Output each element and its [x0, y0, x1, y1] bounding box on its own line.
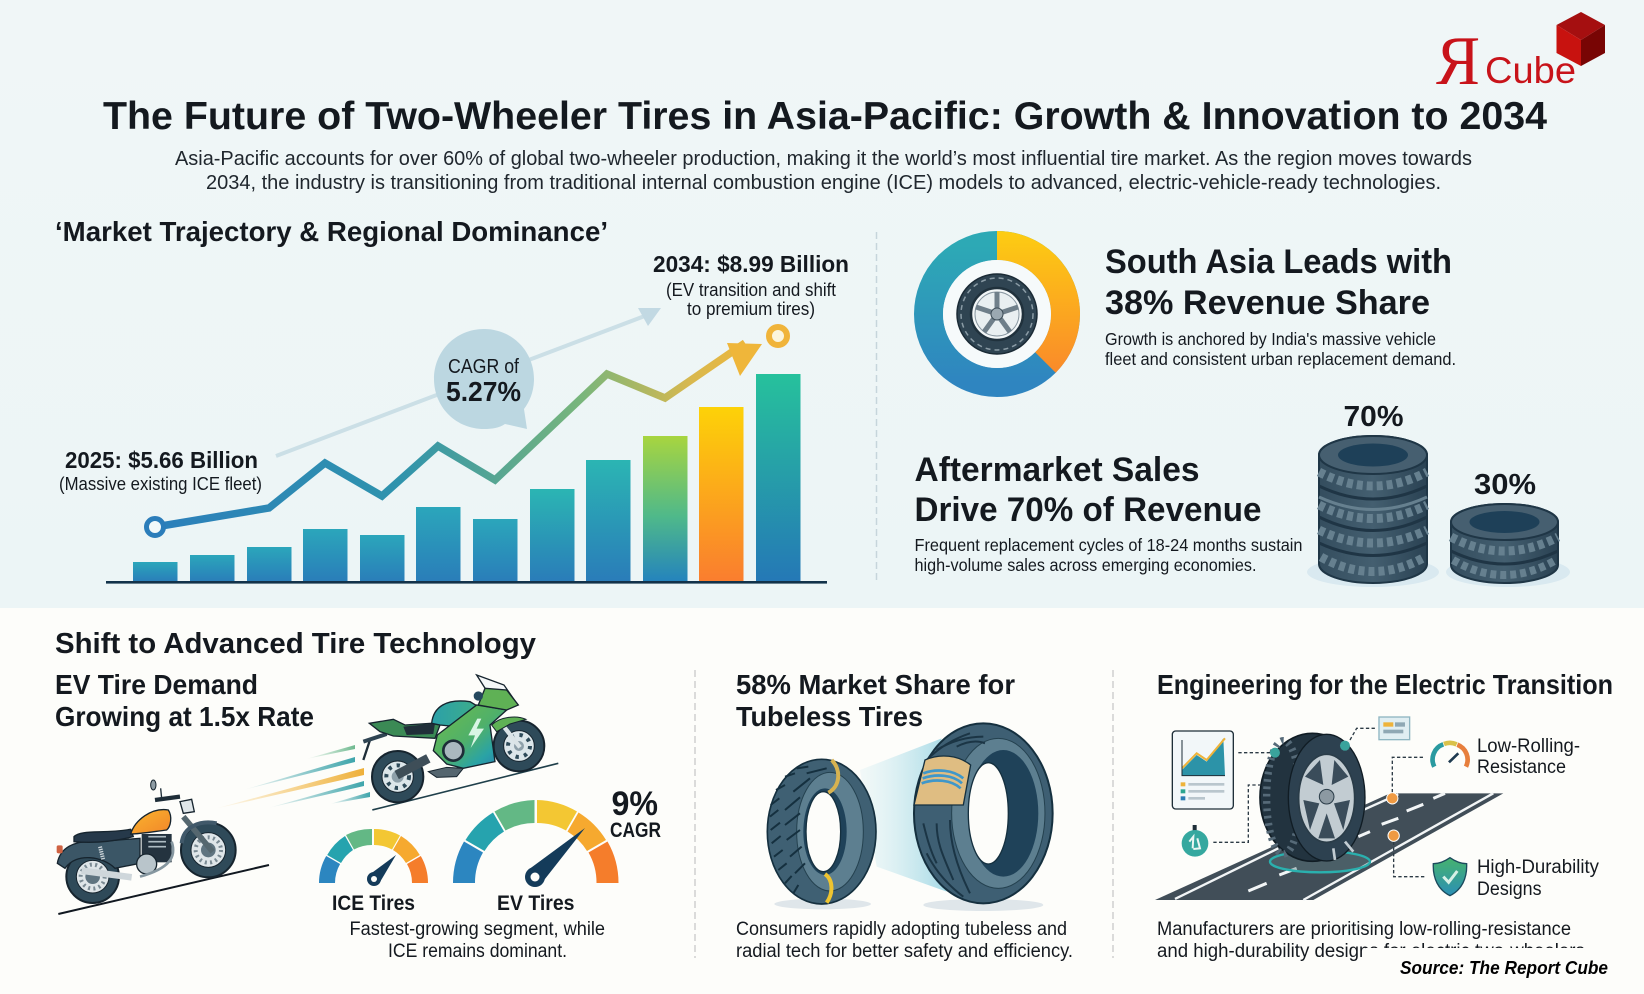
- label: 70%: 70%: [1344, 401, 1404, 433]
- label: 2034 value: to premium tires): [687, 299, 815, 319]
- label: low rolling resistance: Low-Rolling-: [1477, 736, 1580, 757]
- source note: [1366, 948, 1644, 994]
- label: low rolling resistance: [1477, 736, 1580, 778]
- text block: South Asia: Growth is anchored by India's massive vehicle: [1105, 329, 1436, 349]
- road: [1155, 793, 1503, 900]
- heading: EV tire demand: Growing at 1.5x Rate: [55, 701, 314, 732]
- logo: RCube: Я: [1436, 23, 1480, 100]
- icon: rolling resistance gauge: [1433, 743, 1468, 767]
- label: 9% CAGR: CAGR: [610, 819, 661, 842]
- trend line: [155, 343, 745, 527]
- small tire: [767, 759, 876, 904]
- intro text: [175, 148, 1472, 194]
- teal nodes: [1270, 748, 1280, 758]
- light beam: [860, 738, 947, 892]
- icon: electric motorcycle: [363, 675, 558, 810]
- panel: market overview background: [0, 0, 1644, 608]
- text block: fastest growing: [350, 919, 605, 962]
- label: 2034 value: (EV transition and shift: [666, 280, 836, 300]
- text block: South Asia: South Asia Leads with: [1105, 243, 1452, 281]
- text block: aftermarket: [914, 451, 1302, 575]
- label: low rolling resistance: Resistance: [1477, 757, 1566, 778]
- text block: fastest growing: Fastest-growing segment, while: [350, 919, 605, 940]
- end marker: [769, 327, 787, 345]
- label: 2025 value: (Massive existing ICE fleet): [59, 474, 262, 494]
- label: 2034 value: 2034: $8.99 Billion: [653, 251, 849, 277]
- label: high durability: High-Durability: [1477, 857, 1599, 878]
- divider: [876, 232, 878, 582]
- heading: EV tire demand: [55, 669, 314, 732]
- icon: stack of tires 70%: [1307, 436, 1439, 587]
- text block: tubeless: radial tech for better safety and efficiency.: [736, 941, 1073, 962]
- chart: South Asia donut: [928, 231, 1080, 382]
- callout: CAGR bubble: 5.27%: [446, 376, 521, 407]
- panel: technology background: [0, 608, 1644, 994]
- heading: tubeless share: [736, 669, 1015, 732]
- text block: engineering: [1157, 919, 1590, 962]
- label: EV tires: EV Tires: [497, 892, 574, 915]
- chart card: [1172, 731, 1233, 809]
- text block: tubeless: Consumers rapidly adopting tubeless and: [736, 919, 1067, 940]
- cutaway: [914, 756, 971, 805]
- heading: tubeless share: 58% Market Share for: [736, 669, 1015, 700]
- icon: tire with wheel: [957, 274, 1037, 354]
- icon: small stack of tires 30%: [1446, 504, 1570, 587]
- callout: CAGR bubble: [434, 329, 534, 429]
- illustration: tire on road with callouts: [1155, 717, 1503, 900]
- chart: market growth bars and trend line: [106, 327, 827, 584]
- text block: fastest growing: ICE remains dominant.: [388, 941, 567, 962]
- illustration: tubeless tires: [767, 723, 1053, 911]
- heading: EV tire demand: EV Tire Demand: [55, 669, 258, 700]
- heading: advanced tire technology: Shift to Advanced Tire Technology: [55, 628, 536, 660]
- label: ICE tires: ICE Tires: [332, 892, 415, 915]
- logo: RCube: Cube: [1485, 50, 1576, 91]
- label: high durability: [1477, 857, 1599, 900]
- heading: market trajectory: ‘Market Trajectory & Regional Dominance’: [55, 216, 608, 247]
- start marker: [146, 518, 164, 536]
- label: 2025 value: [59, 447, 262, 494]
- source note: Source: The Report Cube: [1400, 958, 1608, 978]
- text block: aftermarket: high-volume sales across emerging economies.: [914, 555, 1256, 575]
- label: 2034 value: [653, 251, 849, 319]
- arrow: CAGR direction: [276, 308, 661, 456]
- glow ring: [1270, 851, 1370, 872]
- dashed connectors: [1213, 728, 1427, 877]
- text block: South Asia: 38% Revenue Share: [1105, 284, 1430, 322]
- icon: speed lines: [214, 745, 370, 809]
- axis: [106, 581, 827, 584]
- text block: South Asia: fleet and consistent urban replacement demand.: [1105, 349, 1456, 369]
- icon: flask: [1182, 825, 1208, 857]
- label: 30%: 30%: [1474, 469, 1536, 501]
- divider: [1112, 670, 1114, 958]
- title: The Future of Two-Wheeler Tires in Asia-Pacific: Growth & Innovation to 2034: [103, 95, 1547, 138]
- heading: tubeless share: Tubeless Tires: [736, 701, 923, 732]
- label: 9% CAGR: [610, 785, 661, 842]
- intro text: 2034, the industry is transitioning from traditional internal combustion engine (ICE) models to advanced, electric-vehicle-ready technologies.: [206, 172, 1441, 194]
- trend arrowhead: [727, 343, 762, 376]
- heading: engineering: Engineering for the Electric Transition: [1157, 669, 1613, 700]
- text block: aftermarket: Drive 70% of Revenue: [914, 491, 1262, 529]
- label: 2025 value: 2025: $5.66 Billion: [65, 447, 258, 473]
- text block: tubeless: [736, 919, 1073, 962]
- text block: engineering: Manufacturers are prioritising low-rolling-resistance: [1157, 919, 1571, 940]
- icon: ICE motorcycle: [57, 780, 269, 914]
- text block: aftermarket: Aftermarket Sales: [914, 451, 1200, 489]
- text block: South Asia: [1105, 243, 1456, 369]
- gauge: EV tires: [453, 800, 619, 887]
- text block: engineering: and high-durability designs for electric two-wheelers.: [1157, 941, 1590, 962]
- small card: [1379, 717, 1410, 740]
- label: high durability: Designs: [1477, 879, 1542, 900]
- bars: [133, 374, 800, 582]
- divider: [694, 670, 696, 958]
- callout: CAGR bubble: CAGR of: [448, 356, 519, 378]
- logo: RCube: [1436, 12, 1605, 100]
- gauge: ICE tires: [319, 829, 428, 886]
- label: 9% CAGR: 9%: [612, 785, 658, 823]
- icon: shield: [1433, 858, 1467, 896]
- large tire: [914, 723, 1053, 903]
- tire: [1260, 733, 1365, 861]
- intro text: Asia-Pacific accounts for over 60% of global two-wheeler production, making it the world’s most influential tire market. As the region moves towards: [175, 148, 1472, 170]
- text block: aftermarket: Frequent replacement cycles of 18-24 months sustain: [914, 535, 1302, 555]
- orange nodes: [1387, 793, 1398, 804]
